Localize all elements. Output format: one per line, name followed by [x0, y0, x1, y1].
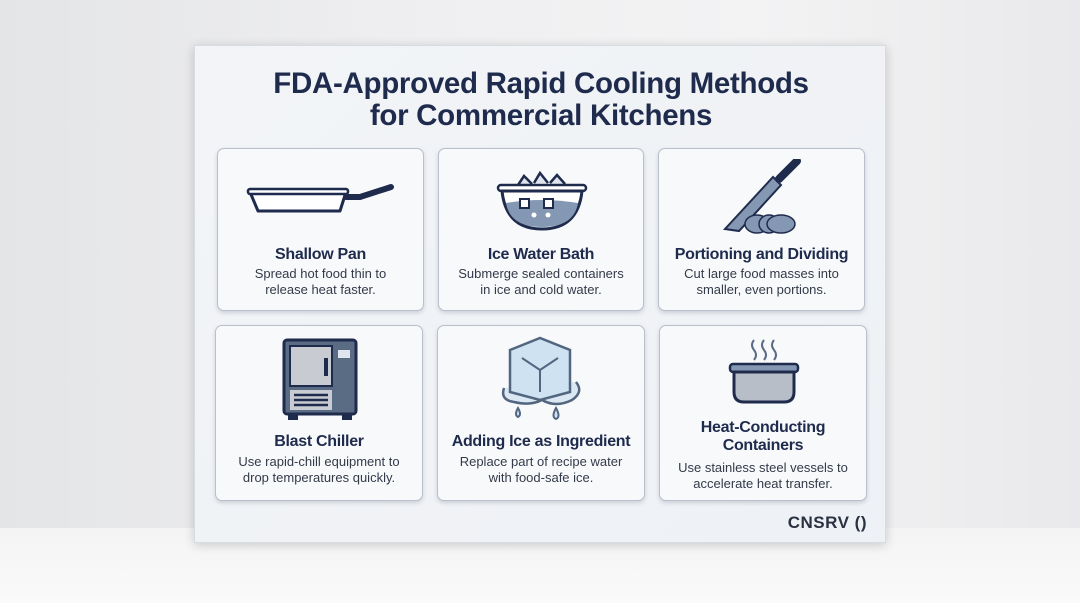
card: shallow pan — [217, 148, 424, 311]
icon: pan — [246, 184, 394, 212]
icon: ice cube — [502, 336, 580, 420]
card: blast chiller: Use rapid-chill equipment to — [238, 454, 400, 469]
title — [273, 67, 809, 132]
card: portioning: smaller, even portions. — [696, 282, 827, 297]
card: ice water bath: Ice Water Bath — [488, 246, 594, 263]
card: blast chiller: Blast Chiller — [274, 433, 364, 450]
logo: CNSRV () — [788, 513, 867, 532]
card: ice water bath — [438, 148, 644, 311]
board — [194, 45, 886, 543]
card: heat-conducting containers: accelerate heat transfer. — [693, 476, 833, 491]
card: shallow pan: Spread hot food thin to — [255, 266, 386, 281]
card: blast chiller: drop temperatures quickly. — [243, 470, 395, 485]
card: adding ice: with food-safe ice. — [489, 470, 593, 485]
card: heat-conducting containers: Containers — [723, 437, 803, 454]
icon: blast chiller — [282, 338, 358, 420]
title: for Commercial Kitchens — [370, 99, 712, 132]
card: shallow pan: Shallow Pan — [275, 246, 366, 263]
card: portioning: Cut large food masses into — [684, 266, 839, 281]
card: heat-conducting containers: Heat-Conducting — [701, 419, 825, 436]
card: blast chiller — [215, 325, 423, 501]
icon: bowl — [496, 171, 588, 230]
card: adding ice: Adding Ice as Ingredient — [452, 433, 630, 450]
card: ice water bath: Submerge sealed containers — [458, 266, 624, 281]
icon: knife — [723, 159, 801, 234]
card: portioning: Portioning and Dividing — [675, 246, 848, 263]
card: portioning — [658, 148, 865, 311]
card: adding ice — [437, 325, 645, 501]
card: heat-conducting containers: Use stainless steel vessels to — [678, 460, 848, 475]
card: heat-conducting containers — [659, 325, 867, 501]
card: adding ice: Replace part of recipe water — [460, 454, 622, 469]
title: FDA-Approved Rapid Cooling Methods — [273, 67, 809, 100]
icon: pot — [728, 339, 800, 404]
card: ice water bath: in ice and cold water. — [480, 282, 602, 297]
card: shallow pan: release heat faster. — [265, 282, 376, 297]
